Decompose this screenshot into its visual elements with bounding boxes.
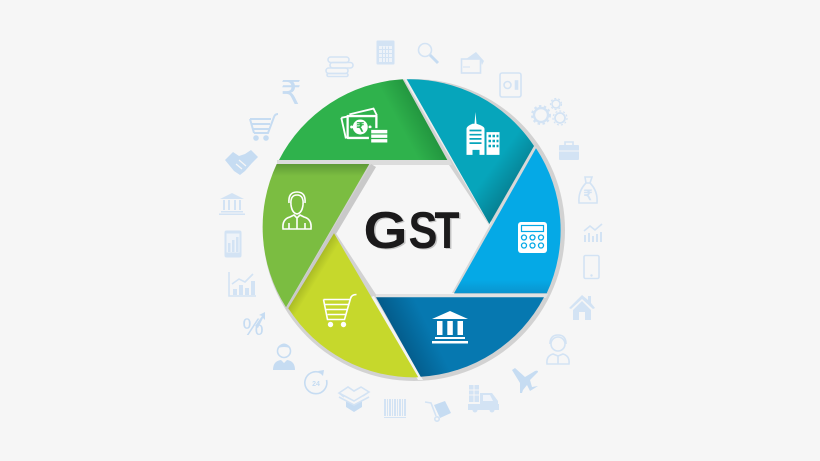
icon: woman support	[273, 344, 295, 370]
icon: rupee: ₹	[280, 74, 302, 111]
segment: blue	[454, 148, 561, 293]
icon: smartphone	[584, 256, 599, 278]
icon: delivery truck	[468, 385, 499, 412]
icon: airplane	[512, 368, 538, 393]
segment: light green	[263, 164, 369, 307]
icon: safe	[500, 73, 521, 97]
icon: hand trolley	[425, 401, 451, 421]
title: GST: G	[364, 202, 408, 260]
segment: teal	[407, 79, 534, 224]
icon: 24 hours: 24	[312, 381, 320, 388]
segment: lime	[288, 233, 418, 377]
GST aperture wheel	[263, 79, 565, 381]
icon: coins	[326, 57, 353, 76]
segment: dark green	[279, 79, 447, 160]
icon: credit card	[462, 52, 484, 73]
icon: handshake	[225, 150, 258, 175]
icon: bank small	[219, 193, 245, 215]
icon: buildings	[466, 112, 500, 155]
icon: shopping cart	[324, 294, 356, 327]
wheel drop shadow	[263, 79, 565, 381]
icon: growth graph	[584, 224, 602, 242]
icon: barcode	[384, 399, 406, 418]
icon: man with headset	[547, 335, 569, 364]
icon: phone chart	[224, 230, 242, 258]
icon: open box	[339, 387, 369, 412]
segment: dark blue	[376, 297, 544, 377]
title: GST: T	[436, 203, 461, 261]
title: GST: T	[434, 202, 460, 260]
icon: percent up: %	[242, 314, 264, 341]
icon: support person	[283, 192, 311, 229]
icon: bar line chart	[229, 272, 256, 296]
centre hexagon panel	[335, 165, 491, 296]
icon: cart small	[250, 114, 278, 140]
icon: calculator	[518, 222, 547, 253]
icon: money bag	[579, 177, 597, 203]
title: GST: G	[365, 203, 409, 261]
title: GST: S	[408, 202, 438, 260]
icon: calculator small	[376, 40, 394, 64]
icon: bank	[432, 311, 468, 344]
gaps and inner shadows	[277, 79, 548, 380]
icon: house	[569, 295, 595, 320]
icon: 24 hours	[305, 370, 327, 394]
icon: magnifier	[418, 44, 438, 63]
icon: gears	[532, 98, 567, 125]
icon: money notes: ₹	[356, 121, 365, 135]
icon: money notes	[341, 109, 388, 144]
icon: briefcase	[559, 142, 579, 160]
title: GST	[364, 202, 461, 261]
title: GST: S	[410, 203, 439, 261]
icon: money bag: ₹	[584, 187, 593, 203]
